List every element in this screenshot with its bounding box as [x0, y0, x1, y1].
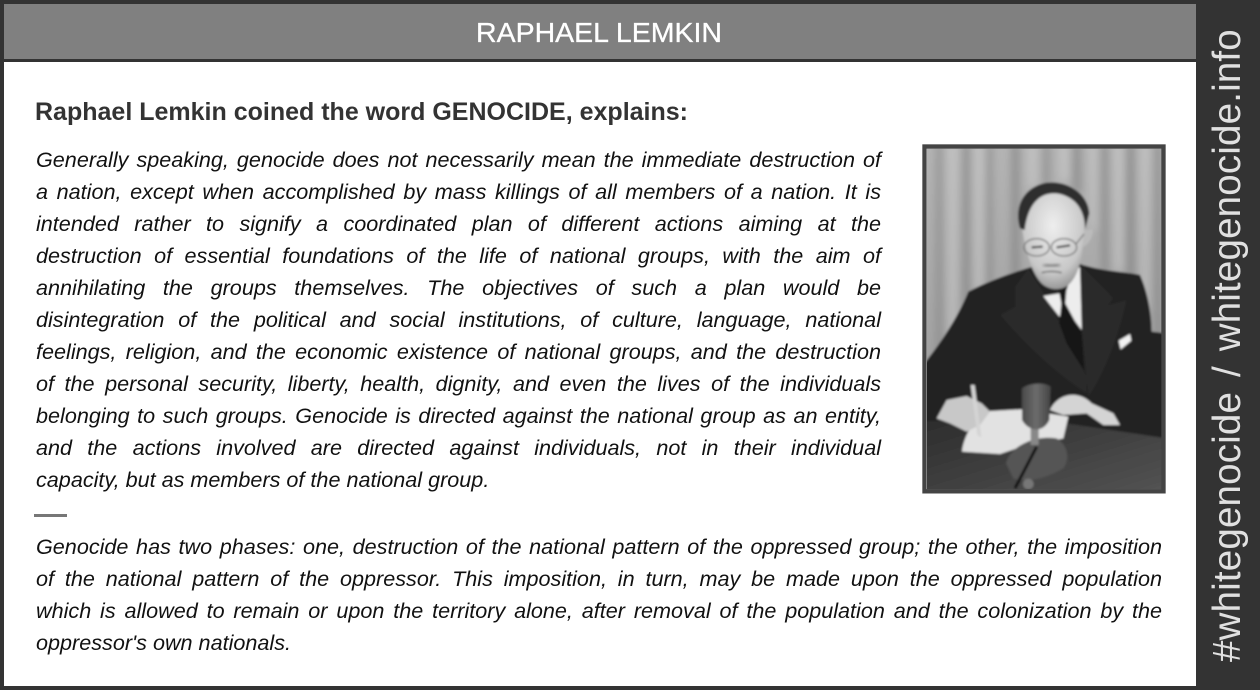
- text block: first quote paragraph: [36, 146, 883, 492]
- text block: second paragraph on two phases: of the national pattern of the oppressor. This imposition, in turn, may be made upon the oppressed population: [36, 566, 1162, 590]
- text block: second paragraph on two phases: oppressor's own nationals.: [36, 630, 291, 654]
- right hand: [1050, 395, 1120, 425]
- text block: first quote paragraph: disintegration of the political and social institutions, of culture, language, national: [36, 306, 881, 332]
- photo frame: [924, 147, 1163, 491]
- divider: [34, 514, 67, 517]
- left hand and pen: [937, 385, 990, 437]
- paper: [962, 409, 1068, 454]
- curtain: [927, 148, 1162, 360]
- text block: first quote paragraph: intended rather to signify a coordinated plan of different actions aiming at the: [36, 210, 881, 236]
- suit jacket: [920, 264, 1167, 450]
- text block: second paragraph on two phases: which is allowed to remain or upon the territory alone, after removal of the population and the colonization by the: [36, 598, 1162, 622]
- text block: first quote paragraph: annihilating the groups themselves. The objectives of such a plan would be: [36, 274, 881, 300]
- table: [927, 422, 1162, 490]
- text block: first quote paragraph: destruction of essential foundations of the life of national groups, with the aim of: [36, 242, 881, 268]
- text block: first quote paragraph: belonging to such groups. Genocide is directed against the national group as an entity,: [36, 402, 881, 428]
- text block: first quote paragraph: a nation, except when accomplished by mass killings of all members of a nation. It is: [36, 178, 881, 204]
- title banner: [4, 4, 1196, 59]
- text block: first quote paragraph: of the personal security, liberty, health, dignity, and even the lives of the individuals: [36, 370, 881, 396]
- text block: second paragraph on two phases: [36, 534, 1162, 654]
- text block: second paragraph on two phases: Genocide has two phases: one, destruction of the national pattern of the oppressed group; the other, the imposition: [36, 534, 1162, 558]
- text block: first quote paragraph: feelings, religion, and the economic existence of national groups, and the destruction: [36, 338, 881, 364]
- lapels and shirt: [1042, 266, 1134, 366]
- microphone: [1006, 384, 1067, 489]
- heading: Raphael Lemkin coined the word GENOCIDE, explains:: [35, 98, 688, 126]
- text block: first quote paragraph: and the actions involved are directed against individuals, not in their individual: [36, 434, 881, 460]
- text block: first quote paragraph: capacity, but as members of the national group.: [36, 466, 489, 492]
- title banner: RAPHAEL LEMKIN: [476, 17, 722, 48]
- head: [1018, 182, 1093, 289]
- sidebar: vertical hashtag and website: #whitegenocide / whitegenocide.info: [1206, 29, 1249, 662]
- photo: Raphael Lemkin writing at a microphone: [922, 144, 1166, 494]
- text block: first quote paragraph: Generally speaking, genocide does not necessarily mean the immediate destruction of: [36, 146, 881, 172]
